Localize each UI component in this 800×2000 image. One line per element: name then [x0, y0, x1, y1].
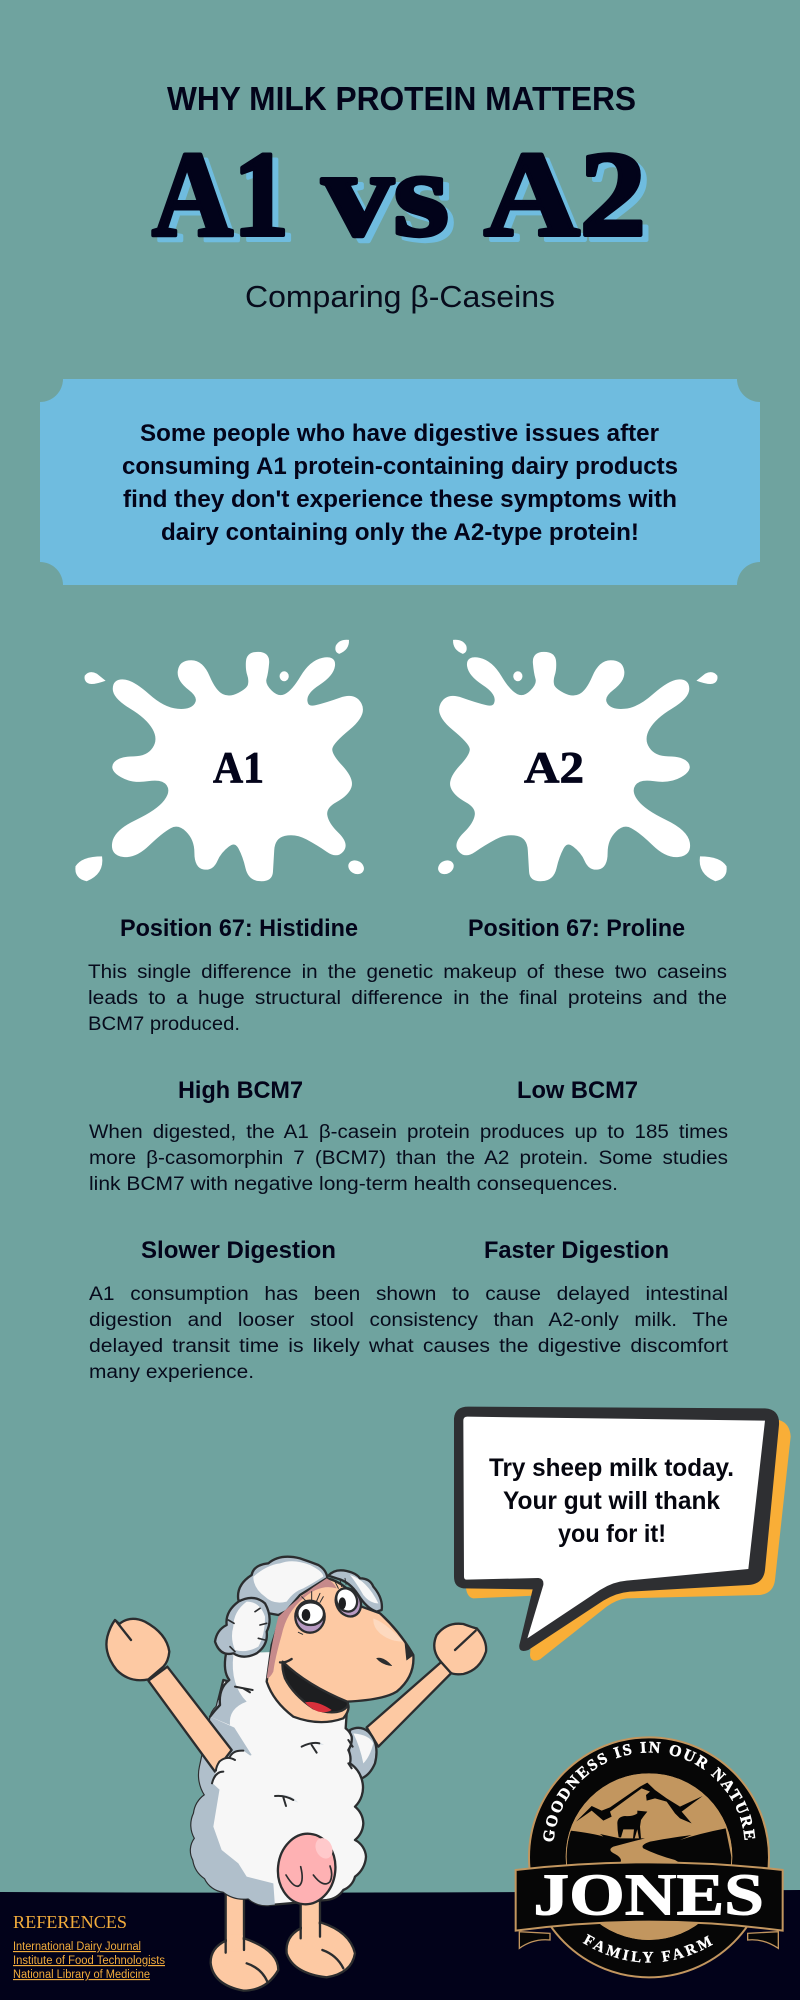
sheep right eye — [331, 1578, 366, 1621]
references: REFERENCES — [13, 1912, 127, 1932]
icon: A1 milk splat — [75, 640, 367, 881]
sheep udder — [274, 1831, 339, 1907]
speech bubble: Your gut will thank — [503, 1487, 720, 1515]
speech bubble — [454, 1407, 791, 1661]
text block: BCM7: more β-casomorphin 7 (BCM7) than the A2 protein. Some studies — [89, 1148, 728, 1169]
main title: A1 vs A2 — [152, 127, 652, 267]
text block: genetic difference — [88, 962, 727, 1035]
sheep side curl — [215, 1598, 270, 1657]
heading: low BCM7: Low BCM7 — [517, 1077, 638, 1104]
references: Institute of Food Technologists — [13, 1955, 165, 1967]
sheep arm right — [367, 1624, 486, 1747]
logo family farm: FAMILY FARM — [582, 1934, 713, 1963]
text block: digestion: A1 consumption has been shown to cause delayed intestinal — [89, 1284, 728, 1305]
sheep top head wool — [238, 1557, 382, 1615]
sheep wool lump over arm — [212, 1751, 252, 1792]
sheep body wool ticks — [220, 1705, 353, 1806]
icon: A1 milk splat: A1 — [213, 743, 264, 792]
sheep arm left — [106, 1619, 232, 1772]
logo arc text: GOODNESS IS IN OUR NATURE — [543, 1742, 756, 1842]
subtitle: Comparing β-Caseins — [245, 279, 555, 314]
sheep body wool — [180, 1680, 366, 1907]
heading: high BCM7: High BCM7 — [178, 1077, 303, 1104]
panel: blue callout — [40, 379, 760, 585]
text block: digestion — [89, 1284, 729, 1383]
main title: A1 vs A2: vs — [322, 127, 449, 262]
main title: A1 vs A2: vs — [328, 132, 455, 267]
text block: BCM7: link BCM7 with negative long-term health consequences. — [89, 1174, 618, 1195]
text block: genetic difference: This single difference in the genetic makeup of these two caseins — [88, 962, 727, 983]
panel: blue callout: Some people who have digestive issues after — [140, 420, 659, 447]
icon: A2 milk splat: A2 — [524, 743, 584, 792]
speech bubble: Try sheep milk today. — [489, 1454, 734, 1482]
heading: slower digestion: Slower Digestion — [141, 1237, 336, 1264]
logo scene — [563, 1773, 733, 1940]
main title: A1 vs A2: A1 — [152, 127, 289, 262]
title: why milk protein matters: WHY MILK PROTEIN MATTERS — [167, 80, 636, 117]
illustration: happy sheep — [106, 1557, 486, 1991]
text block: genetic difference: BCM7 produced. — [88, 1014, 240, 1035]
logo: Jones Family Farm — [514, 1736, 784, 1978]
sheep shoulder wool — [348, 1728, 376, 1778]
logo badge circle — [529, 1737, 769, 1977]
panel: blue callout: dairy containing only the A2-type protein! — [161, 519, 639, 546]
heading: faster digestion: Faster Digestion — [484, 1237, 669, 1264]
speech bubble: you for it! — [558, 1520, 666, 1548]
sheep face — [267, 1578, 413, 1722]
sheep left eye — [295, 1592, 325, 1634]
logo name: JONES — [533, 1861, 764, 1927]
text block: BCM7 — [89, 1122, 728, 1195]
text block: digestion: delayed transit time is likely what causes the digestive discomfort — [89, 1336, 729, 1357]
sheep neck wool — [210, 1652, 287, 1732]
heading: A1 position 67: Position 67: Histidine — [120, 915, 358, 942]
logo banner tails — [519, 1932, 778, 1948]
main title: A1 vs A2: A1 — [158, 132, 295, 267]
text block: genetic difference: leads to a huge structural difference in the final proteins and the — [88, 988, 727, 1009]
panel: blue callout: consuming A1 protein-containing dairy products — [122, 453, 678, 480]
sheep legs and feet — [211, 1890, 355, 1991]
main title: A1 vs A2: A2 — [484, 127, 646, 262]
bottom dark band — [0, 1890, 800, 2000]
references: National Library of Medicine — [13, 1969, 150, 1981]
panel: blue callout: find they don't experience these symptoms with — [123, 486, 677, 513]
text block: digestion: digestion and looser stool consistency than A2-only milk. The — [89, 1310, 728, 1331]
references: International Dairy Journal — [13, 1941, 141, 1953]
references — [13, 1912, 165, 1981]
sheep mouth — [280, 1659, 348, 1712]
text block: digestion: many experience. — [89, 1362, 254, 1383]
text block: BCM7: When digested, the A1 β-casein protein produces up to 185 times — [89, 1122, 728, 1143]
logo banner — [516, 1862, 783, 1931]
main title: A1 vs A2: A2 — [490, 132, 652, 267]
heading: A2 position 67: Position 67: Proline — [468, 915, 685, 942]
icon: A2 milk splat — [436, 640, 727, 881]
